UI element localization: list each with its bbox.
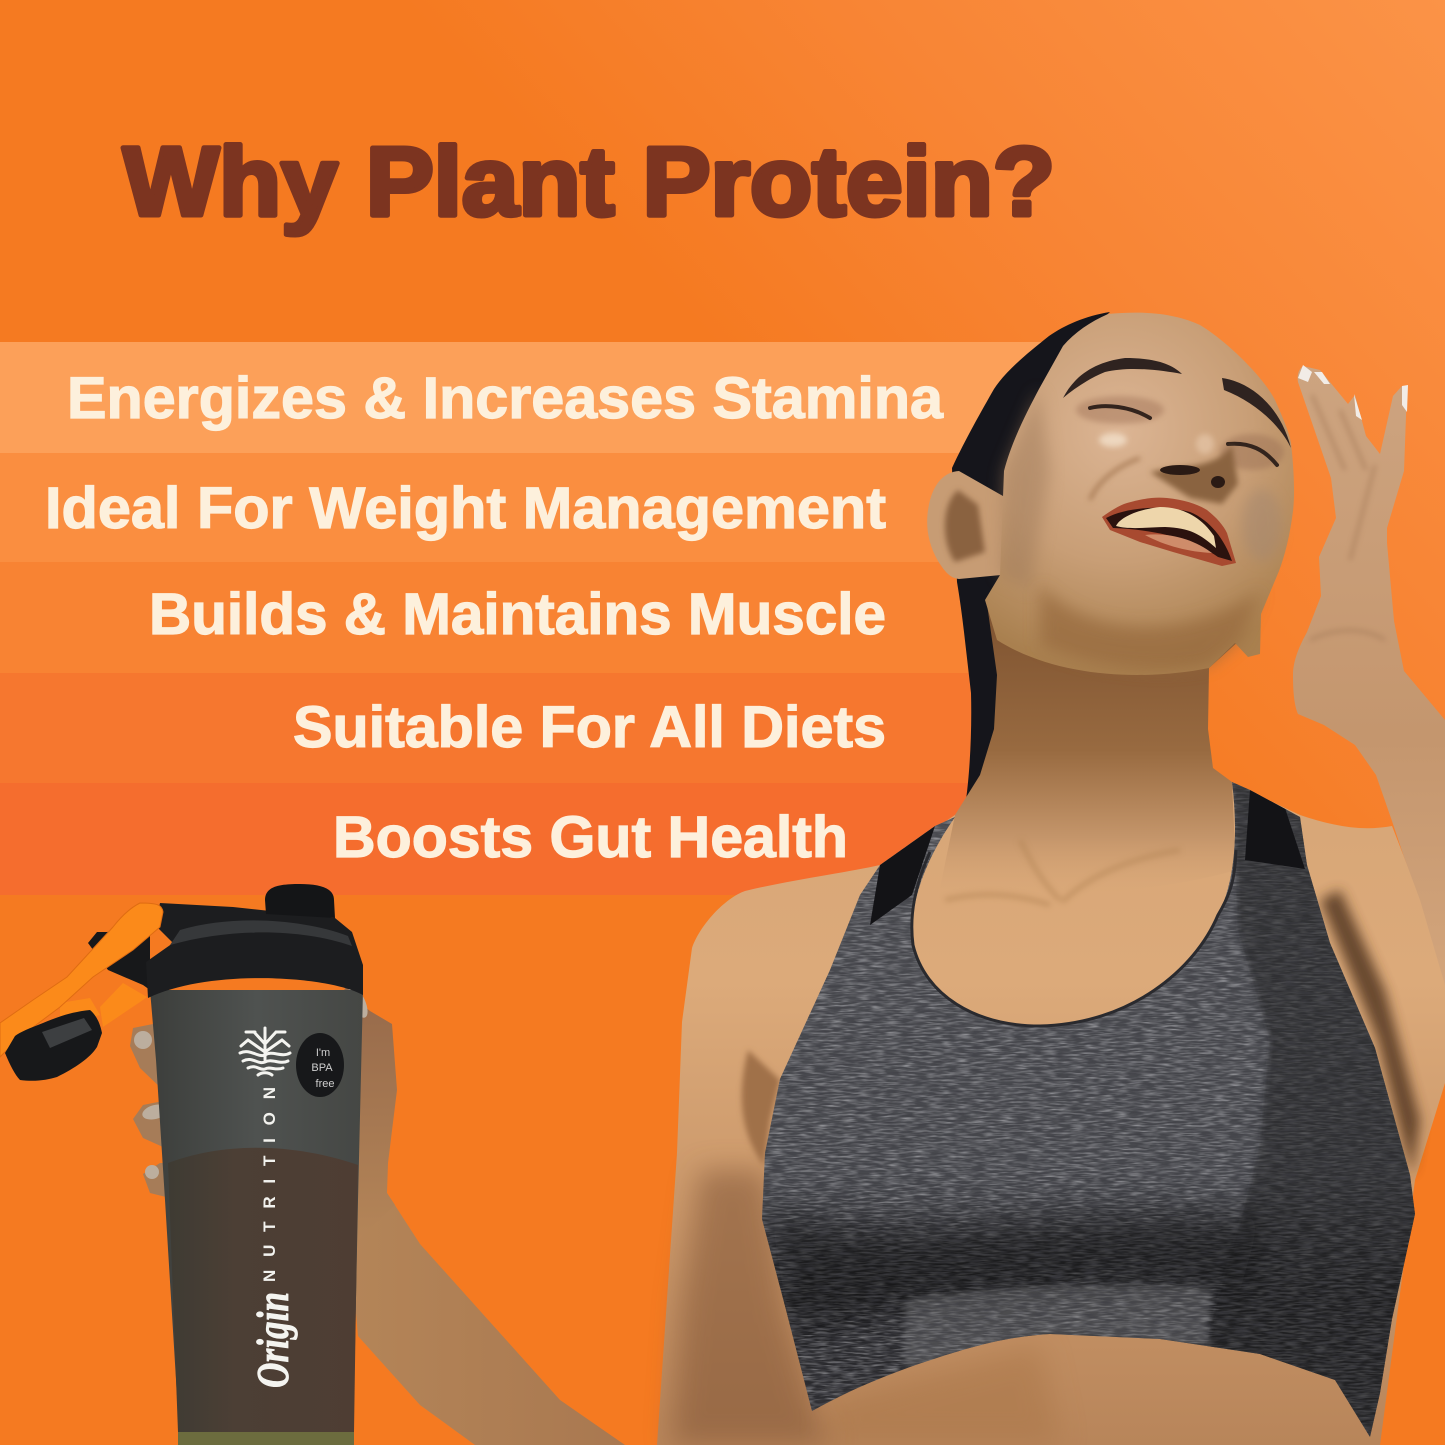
- teeth: [1116, 507, 1216, 548]
- band 3: muscle: Builds & Maintains Muscle: [149, 582, 886, 647]
- bra knit texture light: [750, 780, 1430, 1440]
- NUTRITION wordmark: NUTRITION: [260, 1087, 279, 1282]
- nose shadow: [1150, 445, 1238, 504]
- face soft shading: [1000, 389, 1284, 670]
- left arm crease: [742, 1050, 780, 1166]
- BPA sticker: [296, 1033, 344, 1097]
- mouth interior: [1106, 508, 1232, 561]
- nostrils: [1160, 465, 1225, 488]
- right arm and hand: [1293, 366, 1445, 985]
- lower lip: [1145, 534, 1212, 553]
- orange strap back behind cap: [60, 998, 100, 1025]
- forearm: [345, 1190, 625, 1445]
- spout cap: [265, 884, 335, 918]
- band 1: energizes: [0, 342, 1060, 453]
- hair: [952, 312, 1110, 800]
- under-bust shadow: [770, 1210, 1260, 1330]
- band 2: weight management: Ideal For Weight Management: [45, 476, 886, 541]
- right eye socket: [1220, 434, 1284, 470]
- hem highlight: [905, 1285, 1212, 1368]
- band 1: energizes: Energizes & Increases Stamina: [67, 366, 944, 431]
- face: [985, 313, 1294, 675]
- sports bra: [750, 780, 1430, 1445]
- band 5: gut health: [0, 783, 1000, 895]
- fingernails on shaker: [134, 984, 372, 1179]
- BPA sticker: I'm: [316, 1047, 330, 1059]
- right cheek shade: [1242, 489, 1282, 561]
- title: Why Plant Protein?: [123, 127, 1055, 236]
- left cheek highlight: [1099, 433, 1127, 447]
- woman photo illustration: [657, 312, 1445, 1445]
- hanging cap: [5, 1010, 102, 1081]
- shaker lid: [146, 903, 363, 998]
- BPA sticker: BPA: [311, 1062, 333, 1074]
- chin shadow: [1040, 585, 1262, 670]
- shaker and hand: [0, 884, 625, 1445]
- collarbone shading: [945, 840, 1180, 905]
- hinge: [88, 925, 150, 990]
- lid highlight band: [170, 920, 352, 946]
- closed eyes: [1090, 406, 1277, 465]
- inner ear: [945, 490, 985, 562]
- protein liquid: [168, 1148, 358, 1432]
- bra knit texture dark: [750, 780, 1430, 1440]
- BPA sticker: free: [316, 1078, 334, 1090]
- gripping fingers: [130, 1024, 178, 1198]
- band 4: diets: [0, 673, 1000, 783]
- mouth lips: [1102, 498, 1236, 566]
- olive base: [178, 1432, 354, 1445]
- orange strap lower: [100, 983, 147, 1027]
- nose highlight: [1196, 434, 1214, 454]
- band 2: weight management: [0, 453, 1000, 562]
- left arm shadow: [672, 1170, 835, 1445]
- band 4: diets: Suitable For All Diets: [293, 695, 886, 760]
- smile line: [1090, 458, 1140, 500]
- ear: [927, 471, 1010, 579]
- band 3: muscle: [0, 562, 1000, 673]
- finger creases: [1310, 395, 1385, 640]
- black panels: [870, 790, 1305, 925]
- Origin wordmark: Origin: [247, 1292, 298, 1388]
- bra right shadow: [1202, 780, 1430, 1445]
- benefit bands: [0, 342, 1060, 895]
- left eye socket: [1076, 396, 1164, 424]
- palm and thumb: [340, 985, 397, 1240]
- torso and left arm: [657, 782, 1445, 1445]
- abdomen shadow: [830, 1345, 1060, 1445]
- bottle body: [150, 990, 363, 1445]
- fingernails: [1298, 365, 1408, 420]
- logo tree: [240, 1028, 290, 1075]
- bra fabric: [750, 780, 1430, 1440]
- bra neckline edge: [912, 850, 1236, 1026]
- neck: [940, 604, 1240, 895]
- orange strap upper: [0, 903, 163, 1057]
- band 5: gut health: Boosts Gut Health: [333, 805, 848, 870]
- right armpit shadow: [1320, 890, 1420, 1175]
- cap highlight: [42, 1018, 92, 1048]
- eyebrows: [1063, 358, 1291, 448]
- temple shade: [1000, 389, 1050, 590]
